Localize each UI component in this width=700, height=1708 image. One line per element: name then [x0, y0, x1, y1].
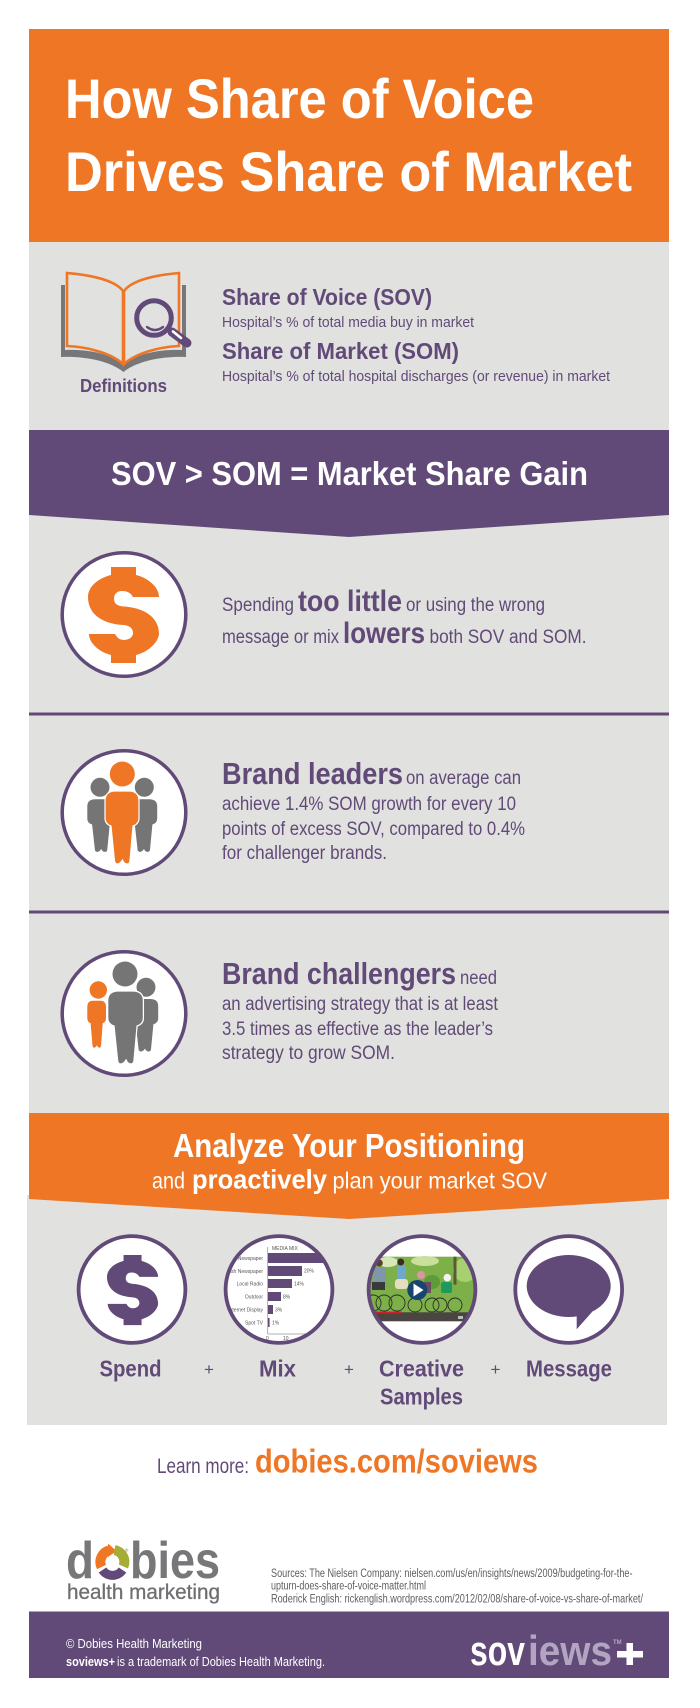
call to action: learn more: dobies.com/soviews [255, 1442, 538, 1480]
text: spending too little: or using the wrong [406, 595, 545, 616]
panel: brand leaders row [62, 751, 525, 874]
text: brand challengers [222, 956, 499, 1064]
text: brand challengers: strategy to grow SOM. [222, 1043, 395, 1064]
image: creative sample video frame [365, 1236, 479, 1343]
banner: SOV > SOM = Market Share Gain: SOV > SOM = Market Share Gain [111, 455, 588, 492]
banner: analyze your positioning: proactively [192, 1164, 327, 1194]
chart: media mix bars: 8% [283, 1294, 291, 1300]
icon: open book with magnifier [61, 273, 187, 372]
text: spending too little [222, 585, 586, 650]
chart: media mix bars: 3% [275, 1308, 283, 1314]
chart: media mix bars: Local Radio [237, 1282, 263, 1288]
labels: spend + mix + creative samples + message: + [344, 1360, 354, 1379]
title line 1: How Share of Voice [65, 67, 534, 130]
chart: media mix bars: 10 [283, 1336, 289, 1342]
chart: media mix bars [221, 1236, 338, 1343]
chart: media mix bars: Internet Display [228, 1308, 263, 1314]
labels: spend + mix + creative samples + message: Mix [259, 1356, 296, 1382]
labels: spend + mix + creative samples + message: + [204, 1360, 214, 1379]
trademark: is a trademark of Dobies Health Marketing. [117, 1654, 325, 1669]
definition heading: SOV: Share of Voice (SOV) [222, 284, 432, 310]
text: brand leaders: on average can [406, 768, 521, 789]
text: brand leaders [222, 756, 525, 864]
logo: soviews+ [470, 1627, 643, 1674]
footer band [29, 1612, 669, 1678]
labels: spend + mix + creative samples + message: Spend [100, 1356, 162, 1382]
banner: analyze your positioning: Analyze Your Positioning [173, 1127, 525, 1164]
logo: soviews+: TM [613, 1640, 622, 1646]
labels: spend + mix + creative samples + message [100, 1356, 612, 1410]
text: spending too little: lowers [343, 617, 425, 650]
text: spending too little: both SOV and SOM. [430, 627, 586, 648]
chart: media mix bars: 20% [304, 1268, 315, 1274]
logo: dobies health marketing [66, 1532, 220, 1604]
labels: spend + mix + creative samples + message: Message [526, 1356, 612, 1382]
labels: spend + mix + creative samples + message: + [491, 1360, 501, 1379]
banner: analyze your positioning [29, 1113, 669, 1219]
banner: SOV > SOM = Market Share Gain [29, 430, 669, 537]
chart: media mix bars: 14% [294, 1282, 305, 1288]
chart: media mix bars: 0 [266, 1336, 269, 1342]
logo: dobies health marketing: d [66, 1532, 94, 1590]
icon: spend dollar [79, 1236, 185, 1343]
title banner [29, 29, 669, 242]
definition body: SOM: Hospital’s % of total hospital discharges (or revenue) in market [222, 369, 610, 385]
definition heading: SOM: Share of Market (SOM) [222, 338, 459, 364]
definitions text block [222, 284, 610, 385]
call to action: learn more [157, 1442, 538, 1480]
trademark: soviews+ [66, 1654, 115, 1669]
chart: media mix bars: Outdoor [245, 1294, 263, 1300]
sources: upturn-does-share-of-voice-matter.html [271, 1580, 426, 1592]
call to action: learn more: Learn more: [157, 1455, 249, 1478]
icon: people with orange leader [62, 751, 186, 874]
icon: orange dollar in circle [62, 553, 186, 676]
text: brand challengers: an advertising strategy that is at least [222, 994, 499, 1015]
icon: people with orange challenger [62, 952, 186, 1075]
logo: soviews+: iews [528, 1627, 612, 1674]
chart: media mix bars: Jewish Newspaper [221, 1269, 263, 1275]
chart: media mix bars: 1% [272, 1320, 280, 1326]
logo: dobies health marketing: ® [125, 1547, 129, 1553]
panel: spending row [62, 553, 586, 676]
logo: dobies health marketing: health marketing [67, 1581, 220, 1604]
labels: spend + mix + creative samples + message: Creative [379, 1356, 464, 1382]
logo: dobies health marketing: bies [130, 1532, 220, 1590]
icon: message speech bubble [515, 1236, 622, 1343]
text: brand challengers: Brand challengers [222, 956, 456, 991]
sources [271, 1568, 644, 1606]
text: brand leaders: achieve 1.4% SOM growth for every 10 [222, 794, 516, 815]
chart: media mix bars: Newspaper [238, 1256, 263, 1262]
chart: media mix bars: MEDIA MIX [272, 1246, 299, 1252]
text: spending too little: too little [298, 585, 402, 618]
banner: analyze your positioning: plan your market SOV [332, 1168, 548, 1194]
text: spending too little: Spending [222, 595, 294, 616]
text: brand leaders: points of excess SOV, compared to 0.4% [222, 819, 525, 840]
text: brand leaders: for challenger brands. [222, 843, 387, 864]
text: brand challengers: 3.5 times as effective as the leader’s [222, 1019, 493, 1040]
text: brand leaders: Brand leaders [222, 756, 403, 791]
chart: media mix bars: Spot TV [245, 1320, 264, 1326]
banner: analyze your positioning: and [152, 1168, 185, 1194]
text: spending too little: message or mix [222, 627, 339, 648]
label: Definitions: Definitions [80, 376, 167, 396]
panel: brand challengers row [62, 952, 499, 1075]
definition body: SOV: Hospital’s % of total media buy in market [222, 315, 474, 331]
copyright: © Dobies Health Marketing [66, 1636, 202, 1651]
logo: soviews+: sov [470, 1627, 525, 1674]
trademark [66, 1654, 325, 1669]
text: brand challengers: need [460, 968, 497, 989]
labels: spend + mix + creative samples + message: Samples [380, 1384, 463, 1410]
title line 2: Drives Share of Market [65, 140, 632, 203]
